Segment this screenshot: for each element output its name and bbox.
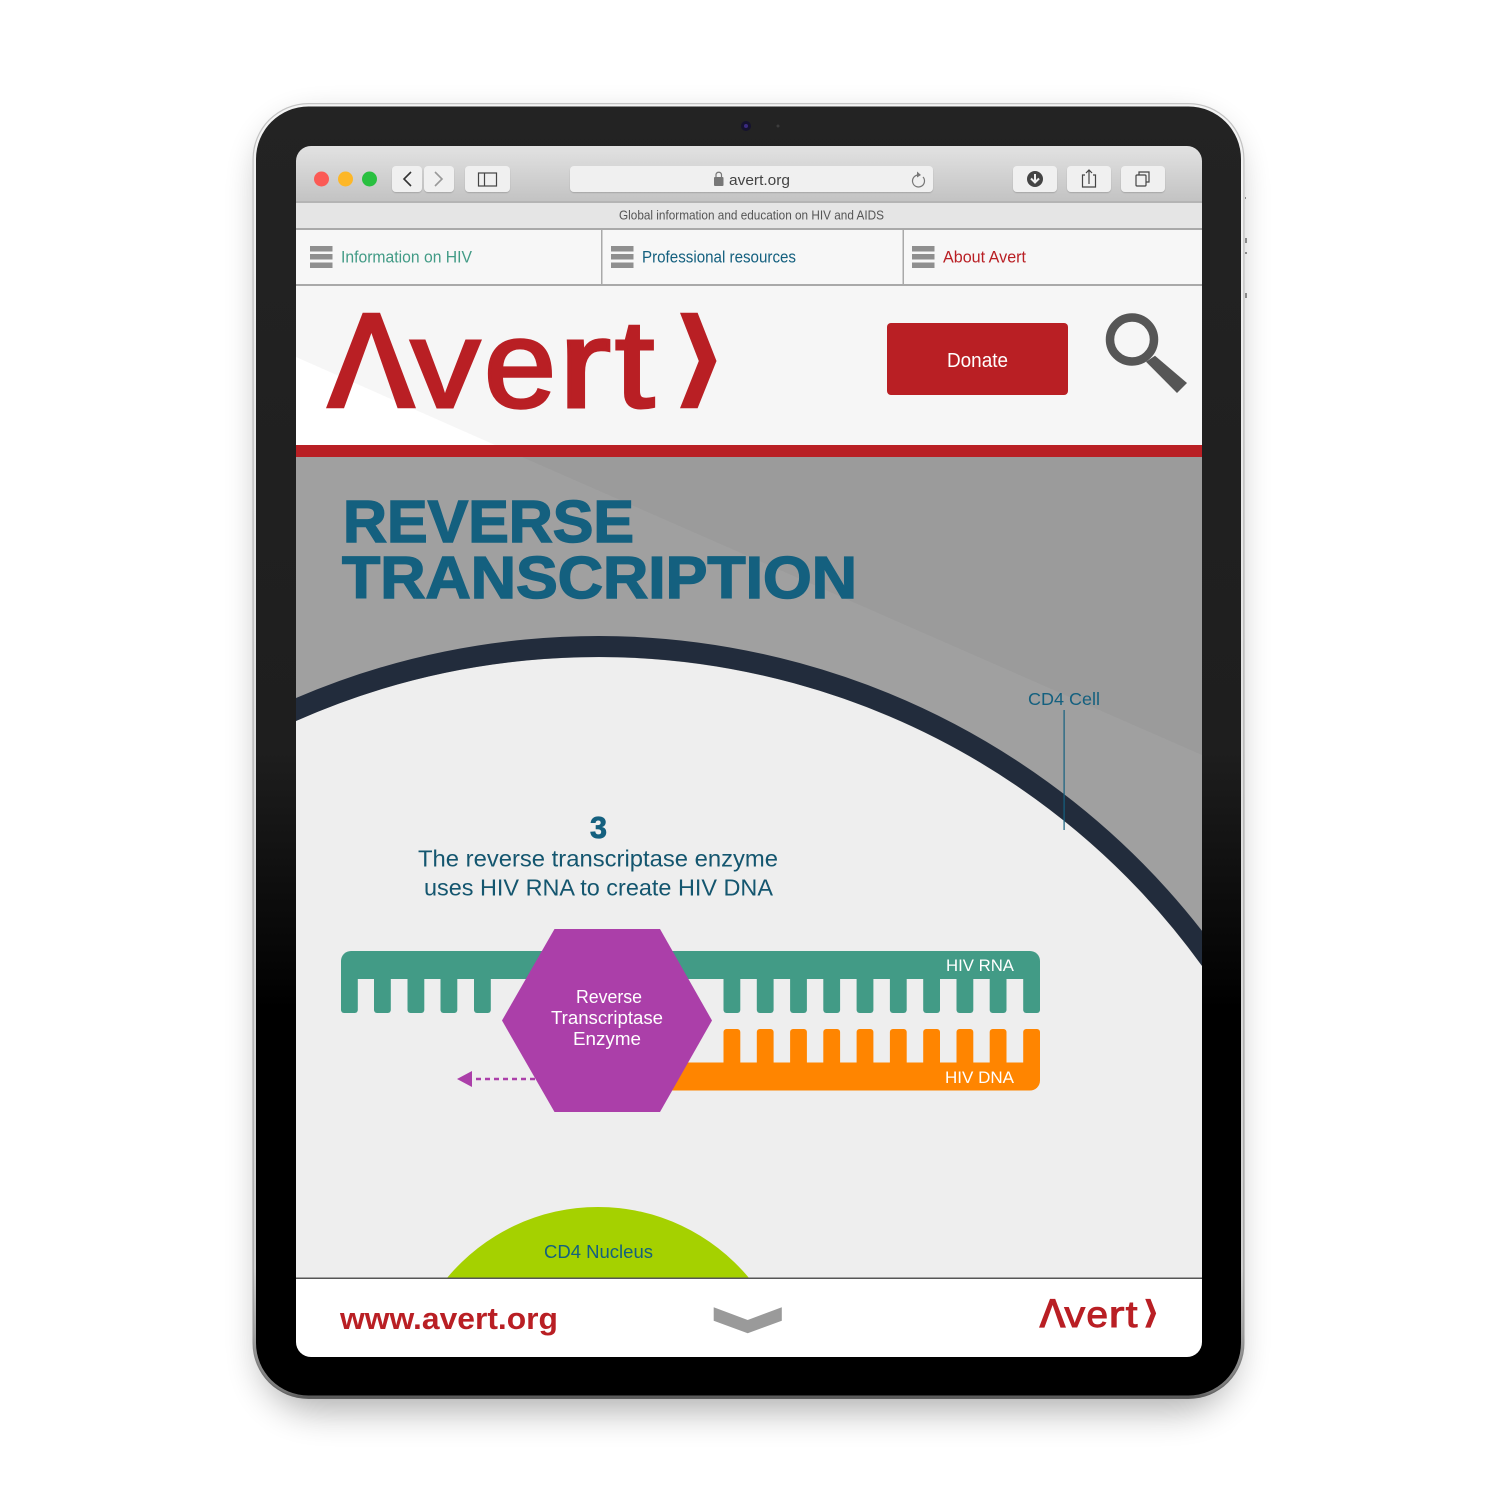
- footer Avert logo: r: [1109, 1294, 1125, 1336]
- icon: scroll chevron: [714, 1307, 782, 1333]
- HIV DNA strand: [640, 1029, 1040, 1090]
- tablet device frame: [252, 103, 1247, 1399]
- label: CD4 Nucleus: CD4 Nucleus: [544, 1242, 653, 1262]
- footer Avert logo: e: [1086, 1294, 1108, 1336]
- title: [342, 500, 854, 600]
- tagline bar: [296, 203, 1202, 228]
- footer Avert logo: v: [1064, 1294, 1085, 1336]
- Avert logo: [326, 312, 716, 410]
- donate button: [887, 323, 1068, 395]
- tablet screen: [280, 146, 1220, 1357]
- side buttons: [1245, 197, 1247, 298]
- device shadow: [262, 122, 1234, 1410]
- red divider bar: [296, 445, 1202, 457]
- download button: [1013, 166, 1057, 192]
- reverse transcriptase enzyme hexagon: Enzyme: [573, 1029, 641, 1049]
- Avert logo: r: [558, 295, 611, 434]
- footer bar: [296, 1278, 1202, 1357]
- HIV DNA strand: HIV DNA: [945, 1068, 1015, 1087]
- browser toolbar: [296, 146, 1202, 203]
- site header background: [296, 286, 1202, 445]
- address bar: avert.org: [729, 172, 790, 189]
- nav item: about Avert: About Avert: [943, 248, 1026, 266]
- nav item: information on HIV: [310, 246, 472, 268]
- grey extracellular background: [296, 457, 1202, 966]
- Avert logo: e: [484, 295, 556, 434]
- forward button: [424, 166, 454, 192]
- title: TRANSCRIPTION: [342, 545, 857, 611]
- CD4 nucleus: [447, 1207, 749, 1278]
- reverse transcriptase enzyme hexagon: [502, 929, 712, 1112]
- label: CD4 Cell: CD4 Cell: [1028, 689, 1100, 709]
- front camera: [741, 121, 780, 131]
- step description: The reverse transcriptase enzyme: [418, 846, 778, 872]
- back button: [392, 166, 422, 192]
- Avert logo: t: [615, 295, 654, 434]
- footer URL: www.avert.org: [339, 1301, 558, 1336]
- reverse transcriptase enzyme hexagon: Reverse: [576, 987, 642, 1007]
- nav item: professional resources: [611, 246, 796, 268]
- donate button: Donate: [947, 350, 1008, 372]
- Avert logo: v: [411, 293, 480, 434]
- HIV RNA strand: [341, 951, 1040, 1013]
- CD4 cell body: [280, 647, 1220, 1278]
- traffic lights: [314, 172, 377, 186]
- nav item: about Avert: [912, 246, 1026, 268]
- HIV RNA strand: HIV RNA: [946, 956, 1015, 975]
- footer Avert logo: [1039, 1298, 1156, 1328]
- share button: [1067, 166, 1111, 192]
- navigation bar: [296, 228, 1202, 286]
- footer Avert logo: t: [1126, 1294, 1138, 1336]
- arrow: enzyme direction: [457, 1071, 540, 1087]
- sidebar button: [465, 166, 510, 192]
- tagline bar: Global information and education on HIV and AIDS: [619, 208, 884, 222]
- step description: [418, 850, 777, 896]
- step number: 3: [590, 810, 607, 845]
- nav item: information on HIV: Information on HIV: [341, 248, 472, 266]
- title: REVERSE: [343, 489, 634, 555]
- reverse transcriptase enzyme hexagon: Transcriptase: [551, 1008, 663, 1028]
- nav item: professional resources: Professional resources: [642, 248, 796, 266]
- icon: magnifying glass: [1110, 318, 1187, 393]
- address bar: [570, 166, 933, 192]
- tabs button: [1121, 166, 1165, 192]
- step description: uses HIV RNA to create HIV DNA: [424, 874, 774, 900]
